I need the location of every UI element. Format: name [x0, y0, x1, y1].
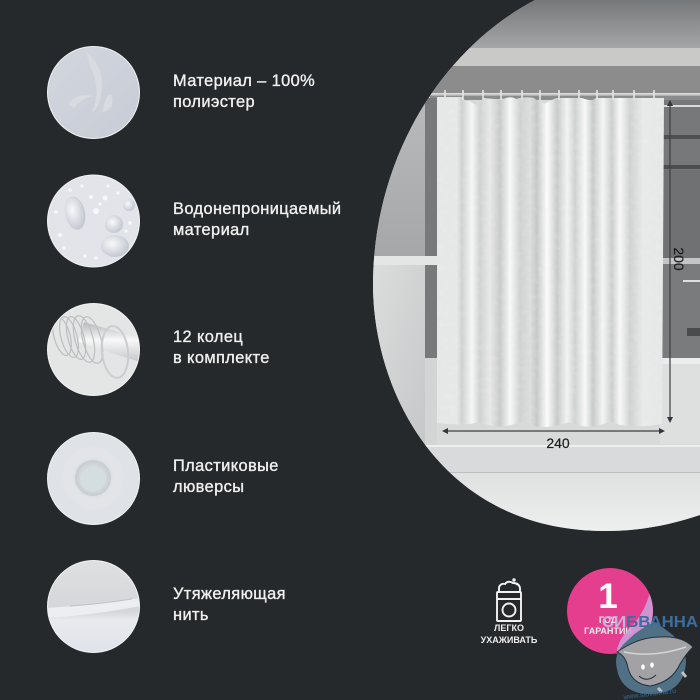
text: rings: 12 колец — [173, 328, 243, 346]
text: grommets: люверсы — [173, 478, 244, 496]
tub — [617, 637, 693, 692]
text: weight thread: нить — [173, 606, 209, 624]
text: weight thread: Утяжеляющая — [173, 585, 286, 603]
text: warranty: ГАРАНТИИ — [584, 626, 632, 636]
photo: grommet — [47, 432, 140, 525]
photo: hem — [47, 560, 140, 653]
panel: bathroom photo with curtain — [370, 0, 700, 540]
curtain speckle texture — [437, 95, 665, 430]
text: waterproof: материал — [173, 221, 250, 239]
label: 200: 200 — [671, 247, 687, 271]
drop over background — [616, 622, 686, 694]
logo name: СИБВАННА — [602, 614, 698, 631]
text: easy care: УХАЖИВАТЬ — [481, 635, 538, 645]
photo: rod with rings — [47, 303, 140, 396]
watermark logo — [602, 592, 700, 700]
text: easy care: ЛЕГКО — [494, 623, 524, 633]
text: grommets: Пластиковые — [173, 457, 279, 475]
text: waterproof: Водонепроницаемый — [173, 200, 341, 218]
text: material: Материал – 100% — [173, 72, 315, 90]
label: 240: 240 — [546, 435, 570, 451]
feature 4: grommets — [47, 432, 279, 525]
photo: fabric pattern — [47, 46, 140, 139]
dimension arrow: width 240 — [442, 428, 665, 451]
badge: 1 year warranty — [567, 568, 653, 654]
curtain rings — [445, 90, 654, 100]
drop over badge — [616, 594, 653, 654]
feature 2: waterproof — [47, 174, 341, 268]
dimension arrow: height 200 — [667, 100, 687, 423]
text: warranty: ГОД — [599, 615, 618, 625]
curtain — [437, 97, 664, 427]
feature 5: weight thread — [47, 560, 286, 653]
photo: water drops — [47, 174, 140, 268]
text: rings: в комплекте — [173, 349, 270, 367]
feature 3: rings — [47, 303, 270, 396]
feature 1: material — [47, 46, 315, 139]
icon: washing machine, easy care — [481, 578, 538, 645]
text: material: полиэстер — [173, 93, 255, 111]
number: 1 — [598, 577, 618, 616]
